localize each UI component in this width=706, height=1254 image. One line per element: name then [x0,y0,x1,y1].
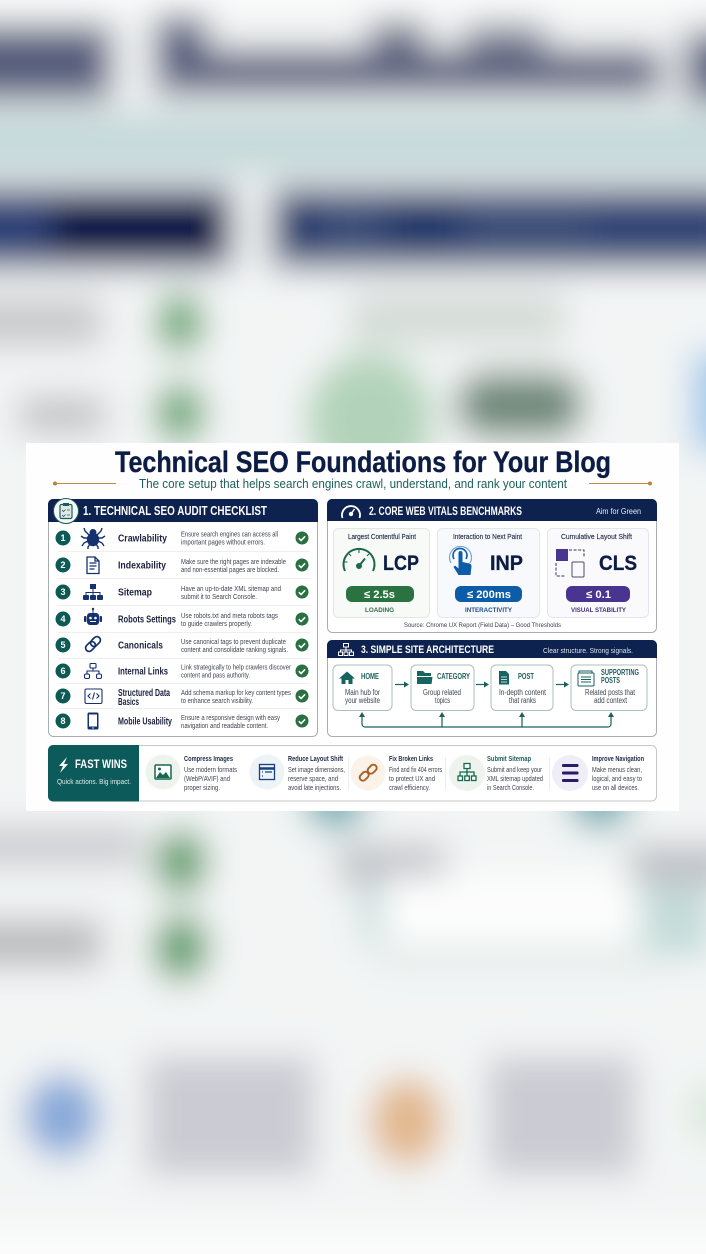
row 7: structured data basics: to enhance search visibility. [181,698,253,705]
card: LCP: LCP [383,552,419,575]
item: improve navigation: logical, and easy to [592,775,642,783]
item: reduce layout shift: Reduce Layout Shift [288,754,343,763]
row 6: internal links: Link strategically to help crawlers discover [181,664,292,672]
row 3: sitemap: 3 [60,587,66,597]
item: fix broken links: Fix Broken Links [389,754,433,763]
row 6: internal links [56,664,308,680]
row 8: mobile usability: 8 [60,716,66,726]
card: LCP: ≤ 2.5s [364,589,395,601]
icon: spider [81,528,105,549]
card: CLS: Cumulative Layout Shift [561,532,632,541]
item: submit sitemap [449,754,543,792]
panel: simple site architecture [327,640,657,736]
row 2: indexability: Make sure the right pages are indexable [181,559,286,566]
infographic card [26,443,679,811]
arrow [476,682,489,688]
item: fix broken links: crawl efficiency. [389,784,430,792]
row 7: structured data basics: 7 [60,691,66,701]
row 4: robots settings: Use robots.txt and meta robots tags [181,613,278,620]
icon: network [84,664,102,678]
panel: core web vitals benchmarks [327,499,657,632]
item: fix broken links: to protect UX and [389,775,435,783]
node: post: POST [518,672,534,681]
item: improve navigation: use on all devices. [592,784,639,792]
card: LCP [334,528,430,618]
panel heading: 3. SIMPLE SITE ARCHITECTURE [361,644,494,656]
card: CLS: ≤ 0.1 [586,589,611,601]
item: reduce layout shift [250,754,345,792]
decorative rule left [53,482,116,486]
row 4: robots settings [56,608,308,628]
item: reduce layout shift: Set image dimensions, [288,766,345,774]
node: post [491,665,553,710]
item: compress images: Use modern formats [184,766,237,774]
fast wins badge: Quick actions. Big impact. [57,777,131,786]
item: improve navigation [552,754,644,792]
icon: site tree [83,584,103,600]
node: supporting posts: POSTS [601,676,620,685]
row 6: internal links: content and pass authority. [181,672,250,680]
row 8: mobile usability: Ensure a responsive design with easy [181,715,280,722]
row 4: robots settings: to guide crawlers properly. [181,621,252,628]
row 1: crawlability: 1 [60,533,66,543]
item: reduce layout shift: avoid late injections. [288,784,341,792]
panel heading: 1. TECHNICAL SEO AUDIT CHECKLIST [83,503,267,518]
row 8: mobile usability: navigation and readable content. [181,723,268,730]
node: category: Group related [423,688,461,697]
icon: gauge [344,549,374,571]
decorative rule right [589,482,652,486]
row 2: indexability: Indexability [118,560,166,572]
row 6: internal links: Internal Links [118,666,168,678]
item: improve navigation: Make menus clean, [592,766,642,774]
card: INP: Interaction to Next Paint [453,532,522,541]
icon: code window [85,689,102,704]
row 8: mobile usability [56,712,308,730]
icon: tap pointer [450,546,472,575]
node: category: topics [435,696,450,705]
node: supporting posts: Related posts that [585,688,636,697]
item: improve navigation: Improve Navigation [592,754,644,763]
card: INP: ≤ 200ms [467,589,511,601]
row 8: mobile usability: Mobile Usability [118,716,172,728]
row 2: indexability: 2 [60,560,66,570]
row 5: canonicals: Use canonical tags to prevent duplicate [181,639,286,646]
title: Technical SEO Foundations for Your Blog [115,446,611,479]
row 5: canonicals: 5 [60,640,66,650]
row 4: robots settings: 4 [60,614,66,624]
node: home: HOME [361,672,379,681]
item: submit sitemap: in Search Console. [487,784,534,792]
row 3: sitemap: Have an up-to-date XML sitemap and [181,586,281,593]
panel: technical SEO audit checklist [48,498,318,736]
feedback bracket arrows [359,712,614,727]
icon: layout shift [556,549,584,577]
arrow [556,682,569,688]
row 7: structured data basics: Structured Data [118,688,170,699]
row 2: indexability [56,557,308,574]
icon: header sitemap [338,644,354,656]
panel: fast wins [48,745,656,802]
row 1: crawlability [56,528,308,549]
item: submit sitemap: Submit Sitemap [487,754,531,763]
row 5: canonicals: Canonicals [118,640,163,652]
item: compress images: (WebP/AVIF) and [184,775,230,783]
node: category [411,665,474,710]
card: LCP: LOADING [365,607,394,614]
row 3: sitemap: Sitemap [118,588,152,598]
row 7: structured data basics [56,688,308,708]
row 7: structured data basics: Basics [118,697,139,708]
row 6: internal links: 6 [60,666,66,676]
node: home: Main hub for [345,688,380,697]
row 7: structured data basics: Add schema markup for key content types [181,690,291,697]
card: INP: INP [490,552,523,575]
header note: Clear structure. Strong signals. [543,646,633,655]
card: INP [438,528,540,618]
subtitle: The core setup that helps search engines crawl, understand, and rank your content [139,476,567,491]
icon: chain link [84,635,102,653]
card: CLS: VISUAL STABILITY [571,607,626,614]
node: post: In-depth content [499,688,547,697]
icon: header gauge [342,506,360,518]
icon: robot [84,608,102,625]
node: supporting posts: SUPPORTING [601,668,639,677]
card: CLS: CLS [599,552,637,575]
row 5: canonicals: content and consolidate ranking signals. [181,647,288,654]
node: category: CATEGORY [437,672,471,681]
icon: document [87,557,99,574]
node: supporting posts [571,665,647,710]
card: INP: INTERACTIVITY [465,607,512,614]
row 3: sitemap: submit it to Search Console. [181,594,257,601]
icon: clipboard badge [54,498,78,524]
row 1: crawlability: Ensure search engines can access all [181,532,278,538]
item: compress images: proper sizing. [184,784,220,792]
node: home: your website [345,696,380,705]
fast wins badge [48,745,139,802]
panel heading: 2. CORE WEB VITALS BENCHMARKS [369,506,522,518]
row 1: crawlability: important pages without errors. [181,540,265,546]
row 4: robots settings: Robots Settings [118,614,176,626]
row 5: canonicals [56,635,308,654]
row 3: sitemap [56,584,308,601]
row 1: crawlability: Crawlability [118,534,167,544]
item: submit sitemap: Submit and keep your [487,766,543,774]
node: home [333,665,392,710]
row 2: indexability: and non-essential pages are blocked. [181,567,279,574]
item: fix broken links [350,754,442,792]
item: submit sitemap: XML sitemap updated [487,775,543,783]
node: supporting posts: add context [594,696,628,705]
fast wins badge: FAST WINS [75,757,127,771]
item: reduce layout shift: reserve space, and [288,775,338,783]
item: compress images: Compress Images [184,754,233,763]
card: CLS [548,528,648,618]
header note: Aim for Green [596,507,641,516]
node: post: that ranks [509,696,536,705]
icon: phone [88,712,98,730]
source note: Source: Chrome UX Report (Field Data) – Good Thresholds [404,622,562,629]
arrow [395,682,409,688]
item: fix broken links: Find and fix 404 errors [389,766,442,774]
card: LCP: Largest Contentful Paint [348,532,416,541]
item: compress images [146,754,237,792]
